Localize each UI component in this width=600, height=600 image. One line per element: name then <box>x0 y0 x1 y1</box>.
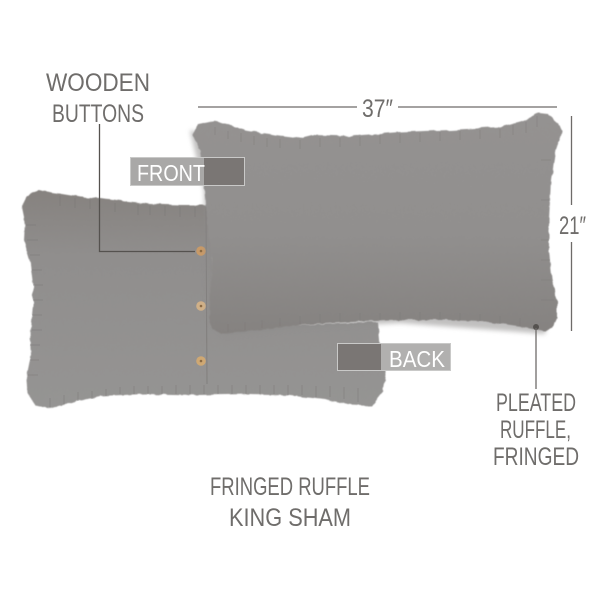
front pillow <box>193 113 562 334</box>
callout: wooden buttons: BUTTONS <box>52 100 144 128</box>
caption <box>210 473 370 532</box>
ruffle stitch lines, back pillow <box>26 196 358 407</box>
dimension: width 37 inches: 37″ <box>362 95 393 123</box>
leader line to button <box>100 124 195 252</box>
label: FRONT: FRONT <box>137 160 205 186</box>
callout: pleated ruffle <box>493 324 579 471</box>
caption: FRINGED RUFFLE <box>210 473 370 501</box>
label: BACK: BACK <box>389 346 446 372</box>
ruffle stitch lines, front pillow <box>215 116 554 332</box>
label: FRONT <box>130 158 244 186</box>
label: BACK <box>338 344 450 372</box>
caption: KING SHAM <box>229 504 351 532</box>
front pillow shadow <box>190 130 550 336</box>
back pillow placket seam <box>206 207 207 384</box>
icon: wooden buttons <box>196 246 206 366</box>
back pillow <box>22 190 386 408</box>
callout: wooden buttons <box>46 69 195 252</box>
callout: wooden buttons: WOODEN <box>46 69 150 97</box>
dimension: height 21 inches: 21″ <box>559 212 586 240</box>
